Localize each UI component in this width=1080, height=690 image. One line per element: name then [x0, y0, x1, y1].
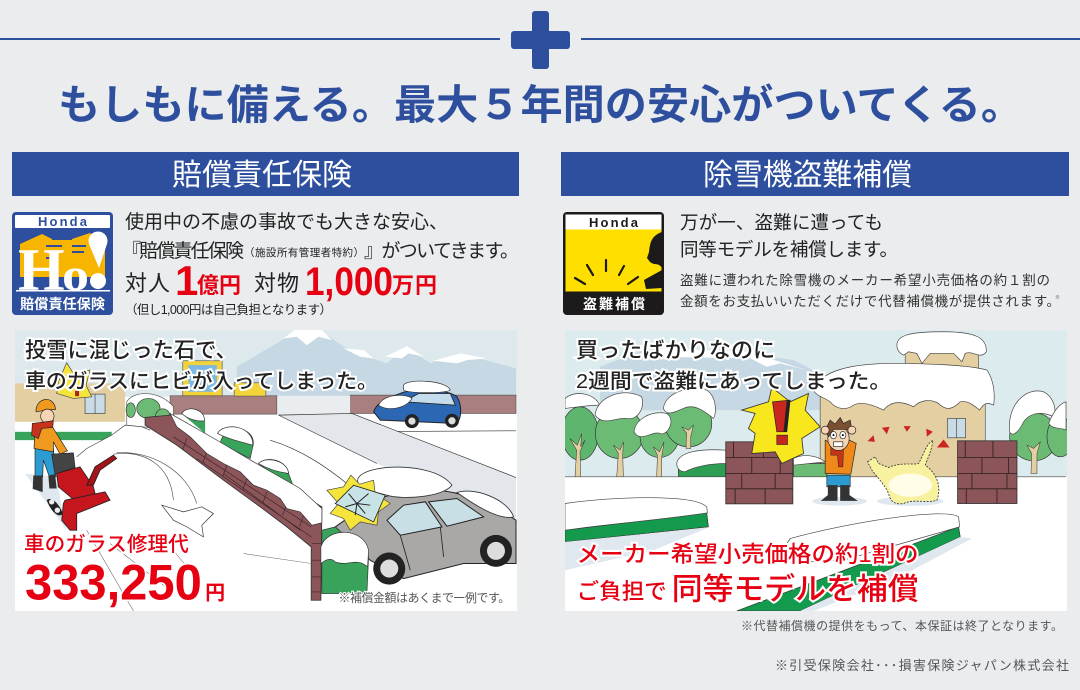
heading: theft compensation — [561, 152, 1069, 196]
text block: liability description: 1,000 — [305, 260, 393, 304]
heading in picture: incident: 2週間で盗難にあってしまった。 — [576, 370, 891, 393]
heading: theft compensation: 除雪機盗難補償 — [703, 159, 912, 192]
bush beside car — [321, 527, 369, 594]
icon: Honda theft badge: 盗難補償 — [583, 296, 645, 312]
panel: liability insurance — [12, 152, 519, 611]
text block: theft description: ※ — [1055, 295, 1060, 301]
heading in picture: incident: 投雪に混じった石で、 — [25, 339, 237, 363]
road — [279, 413, 516, 520]
footnote: replacement terms: ※代替補償機の提供をもって、本保証は終了となります。 — [741, 618, 1063, 633]
heading: liability insurance: 賠償責任保険 — [172, 159, 352, 192]
heading in picture: incident — [576, 338, 891, 393]
text block: liability description: 対物 — [254, 271, 299, 296]
icon: Honda theft badge — [563, 212, 664, 315]
illustration: snow blower and cracked windshield — [15, 327, 517, 611]
text block: liability description: 億円 — [197, 273, 241, 298]
icon: cracked windshield — [327, 475, 390, 530]
text block: liability description: 1 — [175, 257, 198, 304]
text block: theft description: 万が一、盗難に遭っても — [680, 212, 883, 233]
note: example amount: ※補償金額はあくまで一例です。 — [339, 591, 510, 605]
text block: liability description — [122, 211, 519, 317]
back walls and sign — [170, 361, 516, 415]
plus symbol with rule — [0, 11, 1080, 69]
icon: Honda Ho! badge — [12, 212, 113, 315]
house with snowy roof — [813, 332, 994, 477]
person surprised — [812, 417, 867, 506]
hedges — [565, 498, 972, 611]
text block: liability description: 『賠償責任保険 — [122, 240, 244, 262]
person — [32, 399, 67, 492]
icon: Honda Ho! badge: H — [18, 237, 65, 303]
text block: theft description: 金額をお支払いいただくだけで代替補償機が提供されます。 — [680, 294, 1060, 309]
heading in picture: incident: 車のガラスにヒビが入ってしまった。 — [25, 370, 378, 393]
blown snow lines — [25, 453, 312, 611]
gray car — [335, 467, 516, 585]
icon: Honda Ho! badge: o — [62, 249, 89, 300]
text block: liability description: （施設所有管理者特約） — [244, 246, 364, 259]
missing snow blower silhouette — [868, 440, 944, 506]
blue car — [374, 381, 461, 428]
text block: liability description: 』がついてきます。 — [364, 240, 519, 262]
snowy ground — [565, 477, 1067, 611]
trees behind wall — [126, 394, 294, 487]
sky — [15, 330, 517, 397]
snow blower — [47, 453, 117, 530]
house — [15, 363, 125, 440]
callout: compensation: ご負担で — [577, 579, 667, 604]
mountains — [237, 327, 516, 397]
icon: exclamation burst — [742, 387, 820, 463]
text block: liability description: 使用中の不慮の事故でも大きな安心、 — [125, 211, 448, 233]
brick gate pillars — [726, 441, 1017, 504]
illustration: stolen snow blower — [562, 330, 1074, 611]
icon: Honda Ho! badge: 賠償責任保険 — [20, 296, 105, 312]
panel: theft compensation — [561, 152, 1074, 611]
callout: compensation: メーカー希望小売価格の約1割の — [577, 541, 919, 567]
footnote: insurer: ※引受保険会社･･･損害保険ジャパン株式会社 — [775, 658, 1069, 673]
icon: Honda Ho! badge: Honda — [38, 214, 88, 229]
text block: theft description: 盗難に遭われた除雪機のメーカー希望小売価格の約１割の — [680, 273, 1050, 288]
title: もしもに備える。最大５年間の安心がついてくる。 — [58, 82, 1023, 128]
brick wall — [145, 413, 322, 600]
sky — [565, 330, 1067, 477]
icon: Honda theft badge: Honda — [589, 215, 639, 230]
text block: theft description: 同等モデルを補償します。 — [680, 239, 898, 260]
callout: repair cost: 車のガラス修理代 — [24, 533, 189, 556]
text block: theft description — [680, 212, 1060, 309]
snow pile — [77, 425, 312, 611]
heading: liability insurance — [12, 152, 519, 196]
heading in picture: incident: 買ったばかりなのに — [576, 338, 775, 362]
callout: repair cost — [24, 533, 225, 611]
trees — [562, 389, 1074, 477]
callout: repair cost: 333,250 — [25, 555, 202, 611]
callout: repair cost: 円 — [205, 583, 225, 605]
mountain — [600, 350, 820, 410]
text block: liability description: 対人 — [125, 271, 170, 296]
callout: compensation — [577, 541, 919, 607]
alert triangles — [868, 426, 950, 447]
callout: compensation: 同等モデルを補償 — [672, 572, 919, 607]
text block: liability description: 万円 — [392, 273, 437, 298]
text block: liability description: （但し1,000円は自己負担となります） — [125, 303, 332, 317]
heading in picture: incident — [25, 339, 378, 393]
